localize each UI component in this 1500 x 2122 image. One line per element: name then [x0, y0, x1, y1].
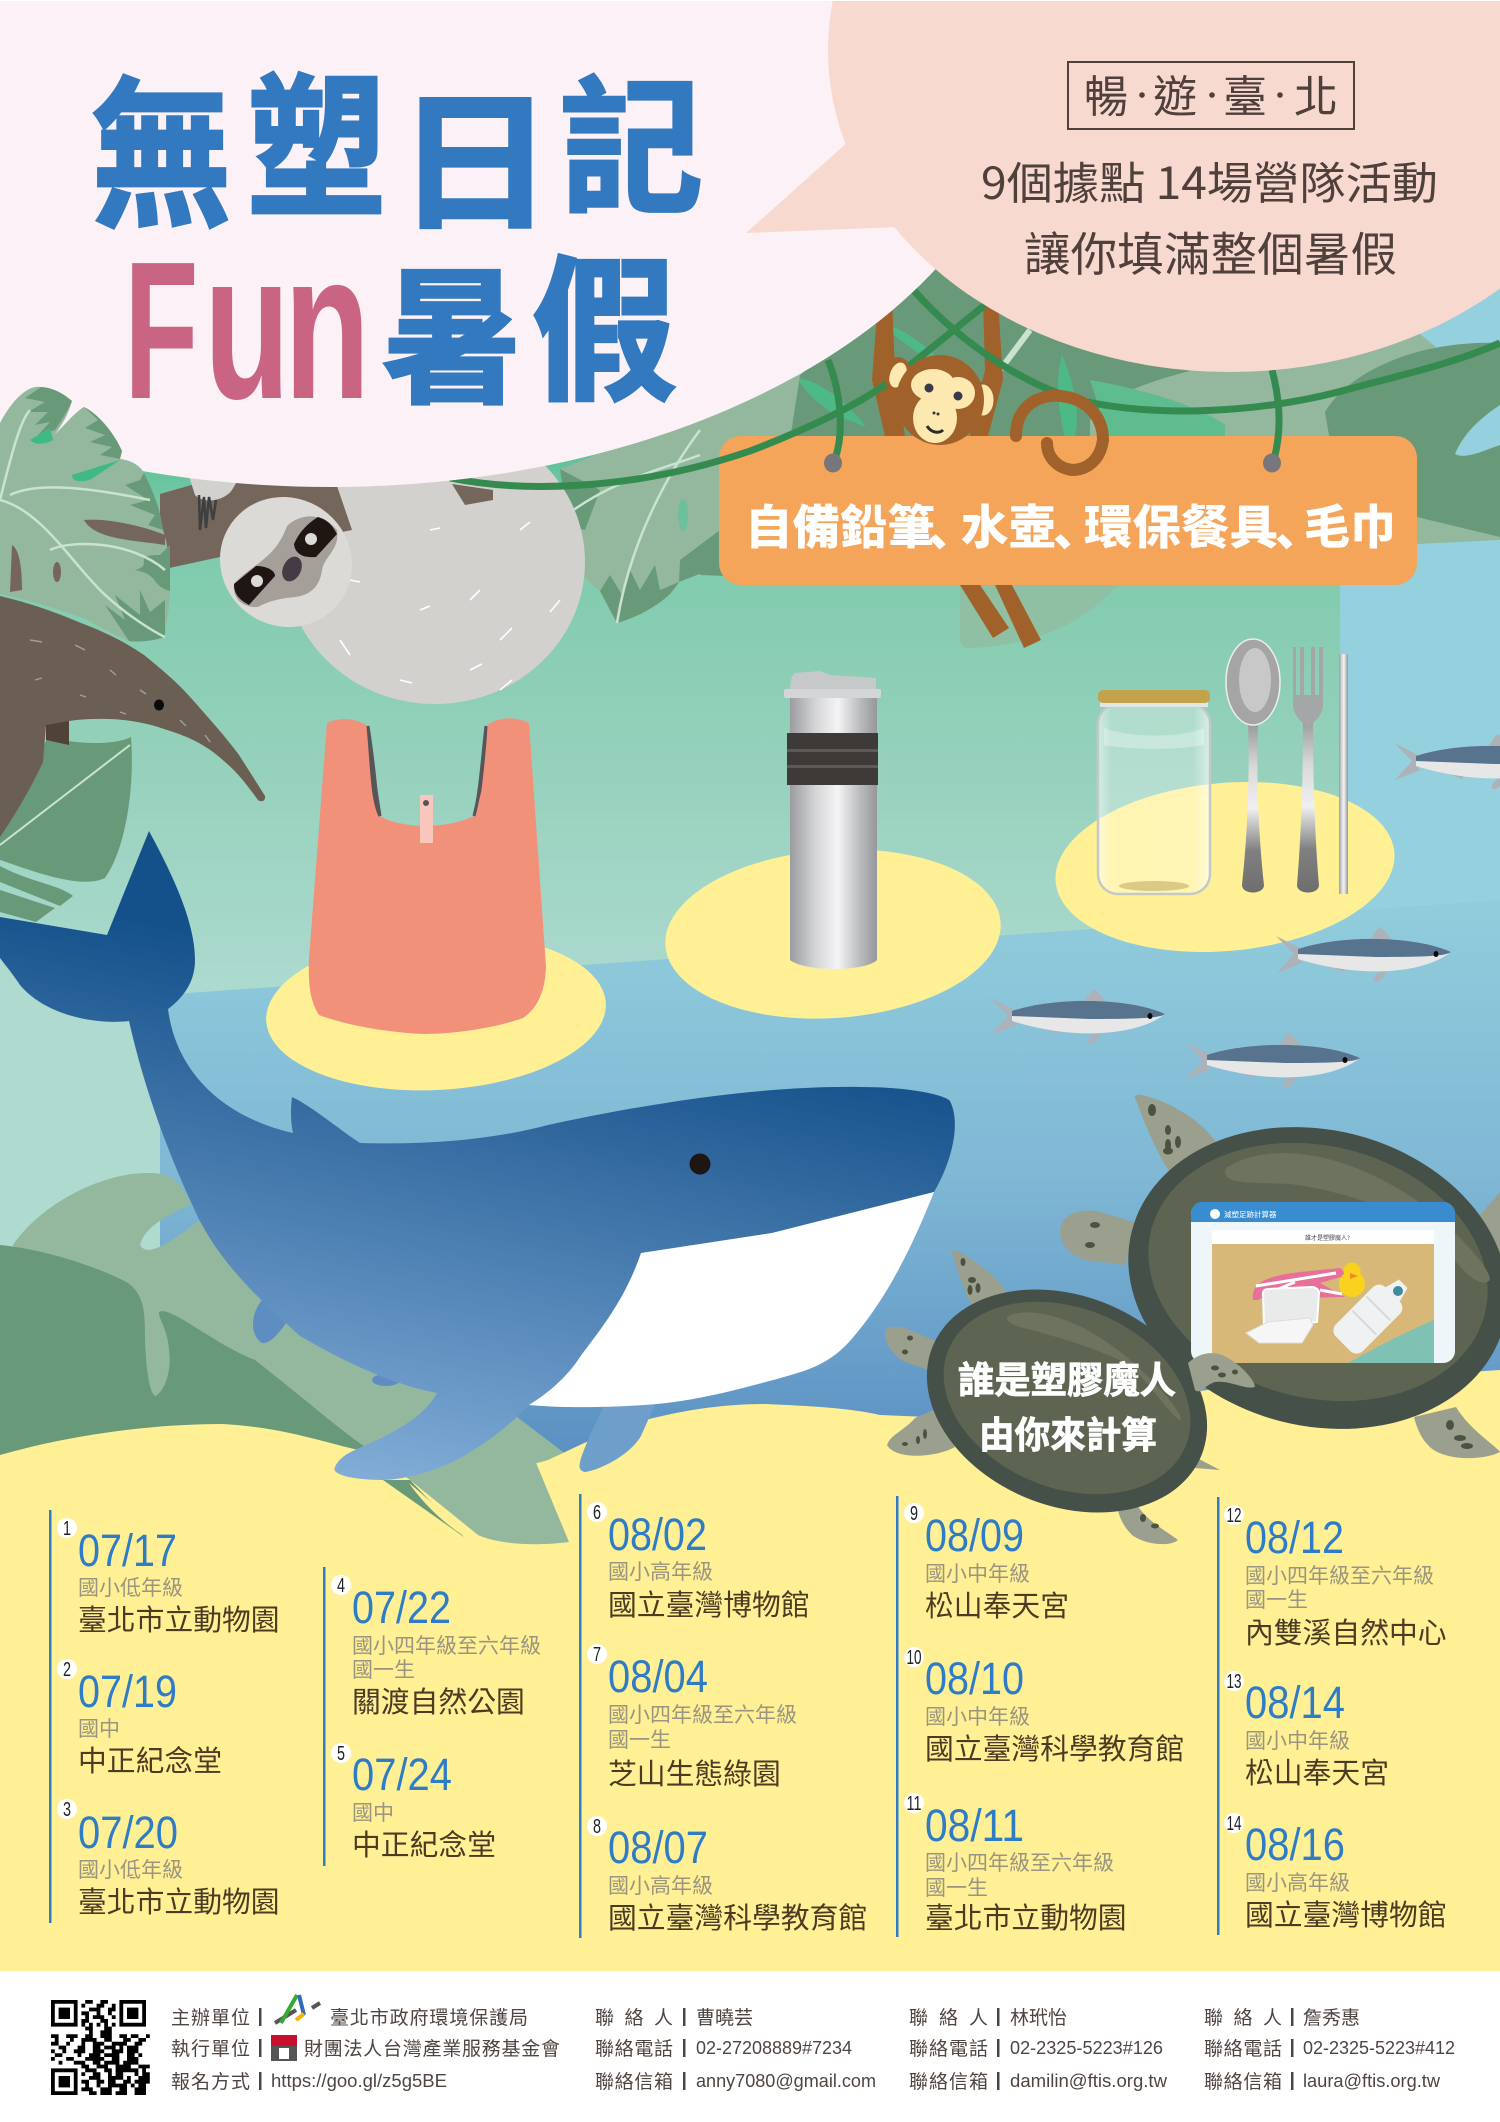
registration row	[171, 2067, 447, 2094]
contact 1: 聯 絡 人	[595, 2003, 673, 2030]
calculator screenshot: 減塑足跡計算器	[1224, 1209, 1277, 1220]
session 13: 13	[1226, 1671, 1242, 1693]
session 9: 9	[910, 1503, 918, 1525]
session 11	[904, 1793, 1127, 1937]
small turtle flippers	[885, 1250, 1220, 1544]
fork	[1293, 647, 1323, 892]
session 5: 07/24	[352, 1749, 452, 1800]
subtitle box: 臺	[1223, 61, 1267, 125]
turtle caption: 由你來計算	[979, 1405, 1157, 1459]
session 2: 2	[63, 1659, 71, 1681]
glass jar	[1098, 690, 1210, 894]
contact 1	[595, 2003, 876, 2094]
contact 3: 聯 絡 人	[1204, 2003, 1282, 2030]
session 4: 國小四年級至六年級	[352, 1630, 541, 1660]
contact 3: 詹秀惠	[1303, 2003, 1360, 2030]
contact 3: 聯絡信箱	[1204, 2067, 1282, 2094]
lower-left leaves	[0, 1173, 600, 1500]
subtitle line 1: 9個據點 14場營隊活動	[981, 147, 1438, 212]
session 7	[587, 1644, 797, 1793]
turtle caption: 誰是塑膠魔人	[958, 1350, 1176, 1404]
session 1: 07/17	[78, 1525, 177, 1576]
whale rear flippers	[580, 1400, 657, 1472]
session 2: 07/19	[78, 1666, 177, 1717]
session 11: 08/11	[925, 1800, 1024, 1851]
session 11: 11	[906, 1793, 922, 1815]
contact 2: 聯絡信箱	[909, 2067, 988, 2094]
session 6: 國立臺灣博物館	[608, 1583, 810, 1624]
session 12	[1224, 1505, 1447, 1652]
session 11: 國一生	[925, 1872, 988, 1902]
whale belly	[529, 1192, 934, 1407]
whale	[0, 831, 955, 1544]
session 10: 國小中年級	[925, 1701, 1030, 1731]
main title: 日	[397, 43, 553, 259]
footer band	[0, 1971, 1500, 2122]
session 4: 關渡自然公園	[352, 1680, 525, 1721]
session 7: 國小四年級至六年級	[608, 1699, 797, 1729]
session 13: 松山奉天宮	[1245, 1751, 1389, 1792]
session 6: 6	[593, 1502, 601, 1524]
sloth and right leaf	[160, 375, 800, 704]
sign board	[719, 436, 1417, 585]
session 14: 國小高年級	[1245, 1867, 1350, 1897]
large turtle flippers	[1060, 1095, 1500, 1458]
session 10	[904, 1647, 1184, 1768]
small turtle overlap flipper	[1188, 1353, 1255, 1391]
anteater and dark leaf	[0, 596, 265, 922]
sign pegs	[824, 454, 1281, 472]
schedule column 1	[49, 1510, 280, 1923]
monkey head and tail	[884, 355, 1103, 470]
foliage behind the sign	[690, 260, 1500, 648]
subtitle box: 遊	[1153, 61, 1197, 125]
sloth body	[285, 420, 585, 704]
contact 2	[909, 2003, 1168, 2094]
session 8: 國立臺灣科學教育館	[608, 1896, 867, 1937]
schedule column 5	[1217, 1497, 1447, 1935]
sign text	[745, 489, 1396, 560]
session 7: 7	[593, 1644, 601, 1666]
session 3	[57, 1799, 280, 1921]
session 5	[331, 1743, 496, 1864]
contact 2: damilin@ftis.org.tw	[1010, 2071, 1168, 2091]
session 14: 08/16	[1245, 1819, 1345, 1870]
session 1: 1	[63, 1518, 71, 1540]
session 1: 國小低年級	[78, 1572, 183, 1602]
jar and cutlery on yellow disc	[1048, 639, 1402, 965]
small turtle shell	[893, 1249, 1241, 1553]
session 6	[587, 1502, 810, 1624]
organiser details	[171, 1995, 560, 2094]
registration row: 報名方式	[171, 2067, 250, 2094]
icon: FTIS logo	[271, 2035, 297, 2061]
session 12: 國一生	[1245, 1584, 1308, 1614]
host row: 臺北市政府環境保護局	[330, 2003, 528, 2030]
session 10: 國立臺灣科學教育館	[925, 1727, 1184, 1768]
host row: 主辦單位	[171, 2003, 250, 2030]
session 3: 臺北市立動物園	[78, 1880, 280, 1921]
pink speech bubble	[0, 0, 1030, 487]
session 3: 3	[63, 1799, 71, 1821]
contact 2: 02-2325-5223#126	[1010, 2038, 1163, 2058]
foam box	[1263, 1287, 1319, 1328]
sardines	[990, 734, 1500, 1088]
monkey limbs	[872, 300, 1041, 648]
contact 2: 聯 絡 人	[909, 2003, 988, 2030]
session 4	[331, 1575, 541, 1721]
contact 3	[1204, 2003, 1455, 2094]
session 4: 4	[337, 1575, 345, 1597]
session 3: 國小低年級	[78, 1854, 183, 1884]
session 6: 08/02	[608, 1509, 707, 1560]
session 9: 國小中年級	[925, 1558, 1030, 1588]
session 9	[904, 1503, 1069, 1625]
subtitle box	[1068, 61, 1354, 129]
subtitle line 2: 讓你填滿整個暑假	[1024, 218, 1397, 285]
session 14: 國立臺灣博物館	[1245, 1893, 1447, 1934]
plastic bottle	[1330, 1270, 1417, 1357]
straw	[1339, 654, 1348, 894]
calculator screenshot	[1191, 1202, 1455, 1363]
executor row	[171, 2034, 560, 2061]
session 13: 國小中年級	[1245, 1725, 1350, 1755]
session 9: 08/09	[925, 1510, 1024, 1561]
contact 1: 02-27208889#7234	[696, 2038, 852, 2058]
background: sky and sea	[0, 0, 1500, 1500]
main title: 塑	[247, 23, 386, 249]
sign text: 自備鉛筆	[745, 489, 935, 558]
session 14: 14	[1226, 1813, 1242, 1835]
session 8: 國小高年級	[608, 1870, 713, 1900]
session 13: 08/14	[1245, 1677, 1345, 1728]
session 2: 中正紀念堂	[78, 1739, 222, 1780]
main title: 無	[91, 28, 232, 260]
session 8	[587, 1816, 867, 1937]
session 14	[1224, 1813, 1447, 1934]
top-left leaf	[0, 387, 170, 642]
session 1	[57, 1518, 280, 1639]
session 2	[57, 1659, 222, 1780]
main title	[91, 23, 703, 443]
main title: 暑	[382, 220, 522, 434]
session 7: 國一生	[608, 1724, 671, 1754]
large turtle with calculator screenshot	[1060, 1088, 1500, 1468]
session 4: 07/22	[352, 1582, 451, 1633]
sloth face	[194, 471, 378, 653]
contact 2: 林玳怡	[1010, 2003, 1067, 2030]
sign text: 毛巾	[1304, 489, 1396, 558]
turtle caption	[958, 1350, 1176, 1459]
striped bag	[1253, 1268, 1348, 1300]
main title: u	[204, 208, 290, 443]
main title: F	[124, 220, 199, 440]
main title: 假	[532, 207, 677, 433]
QR code	[51, 2000, 150, 2095]
session 1: 臺北市立動物園	[78, 1598, 280, 1639]
contact 1: anny7080@gmail.com	[696, 2071, 876, 2091]
sign text: 、	[1275, 491, 1322, 560]
schedule column 3	[579, 1494, 867, 1938]
session 10: 10	[906, 1647, 922, 1669]
small turtle	[885, 1249, 1255, 1553]
contact 2: 聯絡電話	[909, 2034, 988, 2061]
sand	[0, 1370, 1500, 1971]
session 12: 08/12	[1245, 1512, 1344, 1563]
sign text: 、	[1053, 491, 1100, 560]
executor row: 執行單位	[171, 2034, 250, 2061]
session 12: 12	[1226, 1505, 1242, 1527]
contact 3: 聯絡電話	[1204, 2034, 1282, 2061]
session 12: 國小四年級至六年級	[1245, 1560, 1434, 1590]
session 7: 芝山生態綠園	[608, 1752, 781, 1793]
white top edge	[0, 0, 1500, 1]
session 12: 內雙溪自然中心	[1245, 1611, 1447, 1652]
anteater body	[0, 596, 265, 837]
schedule column 4	[896, 1496, 1184, 1937]
session 9: 松山奉天宮	[925, 1584, 1069, 1625]
calculator screenshot: 誰才是塑膠魔人?	[1305, 1233, 1350, 1242]
sloth arm	[160, 470, 352, 570]
session 7: 08/04	[608, 1651, 708, 1702]
large turtle shell	[1096, 1088, 1500, 1468]
tail piece leaf on sand	[383, 1417, 569, 1544]
main title: 記	[560, 30, 703, 243]
contact 1: 聯絡電話	[595, 2034, 673, 2061]
contact 1: 曹曉芸	[696, 2003, 753, 2030]
hanging vines	[450, 280, 1500, 486]
session 3: 07/20	[78, 1807, 178, 1858]
session 11: 國小四年級至六年級	[925, 1847, 1114, 1877]
shopping bag on yellow disc	[262, 718, 610, 1099]
session 6: 國小高年級	[608, 1556, 713, 1586]
subtitle box: 北	[1294, 61, 1338, 125]
contact 1: 聯絡信箱	[595, 2067, 673, 2094]
contact 3: laura@ftis.org.tw	[1303, 2071, 1441, 2091]
icon: EPA logo	[275, 1995, 320, 2023]
main title: n	[284, 208, 370, 443]
whale body	[0, 831, 955, 1480]
spoon	[1226, 639, 1280, 892]
host row	[171, 1995, 528, 2030]
sign text: 水壺	[961, 489, 1056, 558]
subtitle box: 暢	[1084, 61, 1128, 125]
leaf under the sloth	[560, 375, 800, 623]
session 2: 國中	[78, 1713, 120, 1743]
session 4: 國一生	[352, 1654, 415, 1684]
sign text: 環保餐具	[1084, 489, 1278, 558]
session 11: 臺北市立動物園	[925, 1896, 1127, 1937]
executor row: 財團法人台灣產業服務基金會	[304, 2034, 560, 2061]
water bottle on yellow disc	[660, 671, 1006, 1030]
contact 3: 02-2325-5223#412	[1303, 2038, 1455, 2058]
session 13	[1224, 1671, 1389, 1792]
registration row: https://goo.gl/z5g5BE	[271, 2071, 447, 2091]
whale eye	[690, 1154, 710, 1174]
session 5: 中正紀念堂	[352, 1823, 496, 1864]
session 8: 08/07	[608, 1822, 708, 1873]
session 5: 國中	[352, 1797, 394, 1827]
session 10: 08/10	[925, 1653, 1024, 1704]
schedule column 2	[323, 1567, 541, 1866]
session 5: 5	[337, 1743, 345, 1765]
peach speech bubble	[746, 0, 1500, 372]
sign text: 、	[928, 491, 975, 560]
session 8: 8	[593, 1816, 601, 1838]
